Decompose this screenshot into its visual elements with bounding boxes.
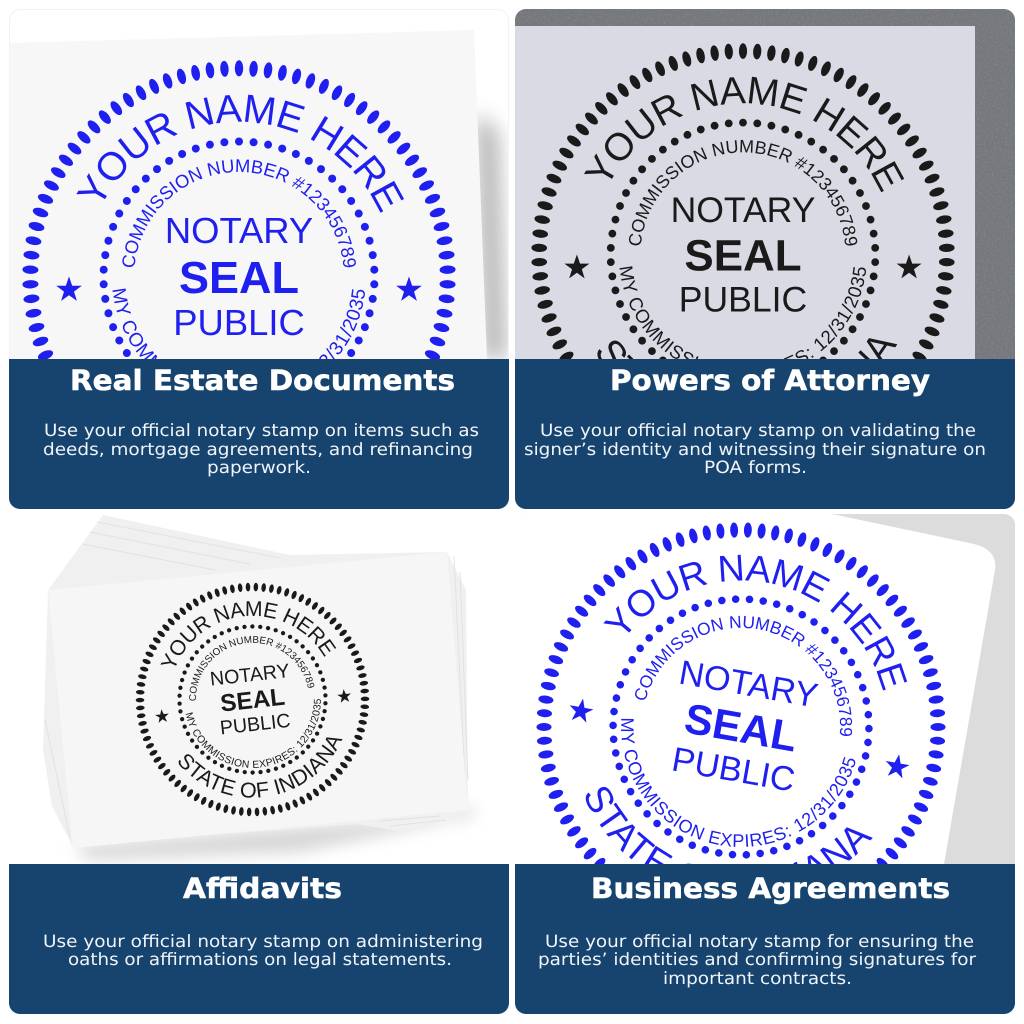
notary stamp: black: COMMISSION NUMBER #123456789 — [629, 140, 858, 246]
notary stamp: blue, tilted: NOTARY — [676, 653, 821, 715]
caption band: powers of attorney — [515, 359, 1015, 509]
notary stamp: blue: NOTARY — [165, 210, 313, 251]
caption band: business agreements — [515, 864, 1015, 1014]
notary stamp: black, small: SEAL — [219, 683, 286, 717]
body text: affidavits: oaths or affirmations on legal statements. — [68, 950, 452, 970]
notary stamp: blue: PUBLIC — [173, 302, 305, 343]
notary stamp: black: STATE OF INDIANA — [597, 338, 898, 359]
body text: affidavits — [43, 932, 483, 970]
body text: real estate documents: paperwork. — [207, 458, 311, 478]
notary stamp: blue, tilted: PUBLIC — [669, 739, 798, 799]
notary stamp: blue: MY COMMISSION EXPIRES: 12/31/2035 — [112, 288, 365, 359]
panel: business agreements — [515, 514, 1015, 1014]
notary stamp: blue, tilted: SEAL — [681, 694, 801, 761]
notary stamp: blue, tilted: COMMISSION NUMBER #123456789 — [635, 616, 852, 736]
notary stamp: black, small: YOUR NAME HERE — [160, 601, 336, 666]
body text: powers of attorney — [525, 423, 984, 474]
body text: powers of attorney: signer’s identity and witnessing their signature on — [524, 440, 986, 460]
notary stamp: black: SEAL — [684, 231, 802, 280]
body text: business agreements: Use your official notary stamp for ensuring the — [545, 932, 974, 952]
notary stamp: black, small: COMMISSION NUMBER #123456789 — [189, 636, 314, 701]
body text: affidavits: Use your official notary stamp on administering — [43, 932, 483, 952]
notary stamp: black, small: NOTARY — [209, 659, 291, 690]
notary stamp: black, small — [136, 582, 370, 816]
notary stamp: blue, tilted: STATE OF INDIANA — [586, 786, 873, 864]
panel: real estate documents — [9, 9, 509, 509]
notary stamp: black: PUBLIC — [679, 279, 807, 319]
heading: affidavits: Affidavits — [183, 872, 342, 905]
notary stamp: black, small: PUBLIC — [219, 709, 292, 739]
notary stamp: blue, tilted — [536, 522, 946, 864]
notary stamp: black: NOTARY — [671, 190, 815, 230]
body text: business agreements — [538, 932, 976, 989]
notary stamp: blue: SEAL — [179, 252, 299, 303]
heading: real estate documents: Real Estate Documents — [70, 364, 455, 397]
notary stamp: blue, tilted: MY COMMISSION EXPIRES: 12/31/2035 — [621, 718, 856, 847]
body text: real estate documents — [43, 421, 479, 478]
notary stamp: blue: COMMISSION NUMBER #123456789 — [122, 159, 356, 268]
notary stamp: blue: YOUR NAME HERE — [76, 94, 404, 213]
body text: real estate documents: Use your official notary stamp on items such as — [44, 421, 479, 441]
body text: business agreements: parties’ identities and confirming signatures for — [538, 950, 976, 970]
notary stamp: black — [531, 43, 955, 359]
heading: business agreements: Business Agreements — [591, 872, 950, 905]
notary stamp: blue: STATE OF INDIANA — [78, 347, 407, 472]
panel: powers of attorney — [515, 9, 1015, 509]
notary stamp: black: YOUR NAME HERE — [584, 76, 904, 192]
card stack — [43, 515, 476, 860]
panel: affidavits — [9, 515, 509, 1014]
body text: powers of attorney: POA forms. — [704, 458, 807, 478]
notary stamp: black, small: STATE OF INDIANA — [178, 737, 342, 798]
notary stamp: black: MY COMMISSION EXPIRES: 12/31/2035 — [620, 266, 866, 359]
notary stamp: blue — [22, 60, 456, 359]
notary stamp: blue, tilted: YOUR NAME HERE — [603, 554, 908, 690]
caption band: affidavits — [9, 864, 509, 1014]
heading: powers of attorney: Powers of Attorney — [610, 364, 930, 397]
body text: business agreements: important contracts. — [663, 969, 852, 989]
body text: powers of attorney: Use your official notary stamp on validating the — [540, 421, 976, 441]
notary stamp: black, small: MY COMMISSION EXPIRES: 12/31/2035 — [186, 699, 322, 768]
body text: real estate documents: deeds, mortgage agreements, and refinancing — [43, 440, 473, 460]
caption band: real estate documents — [9, 359, 509, 509]
